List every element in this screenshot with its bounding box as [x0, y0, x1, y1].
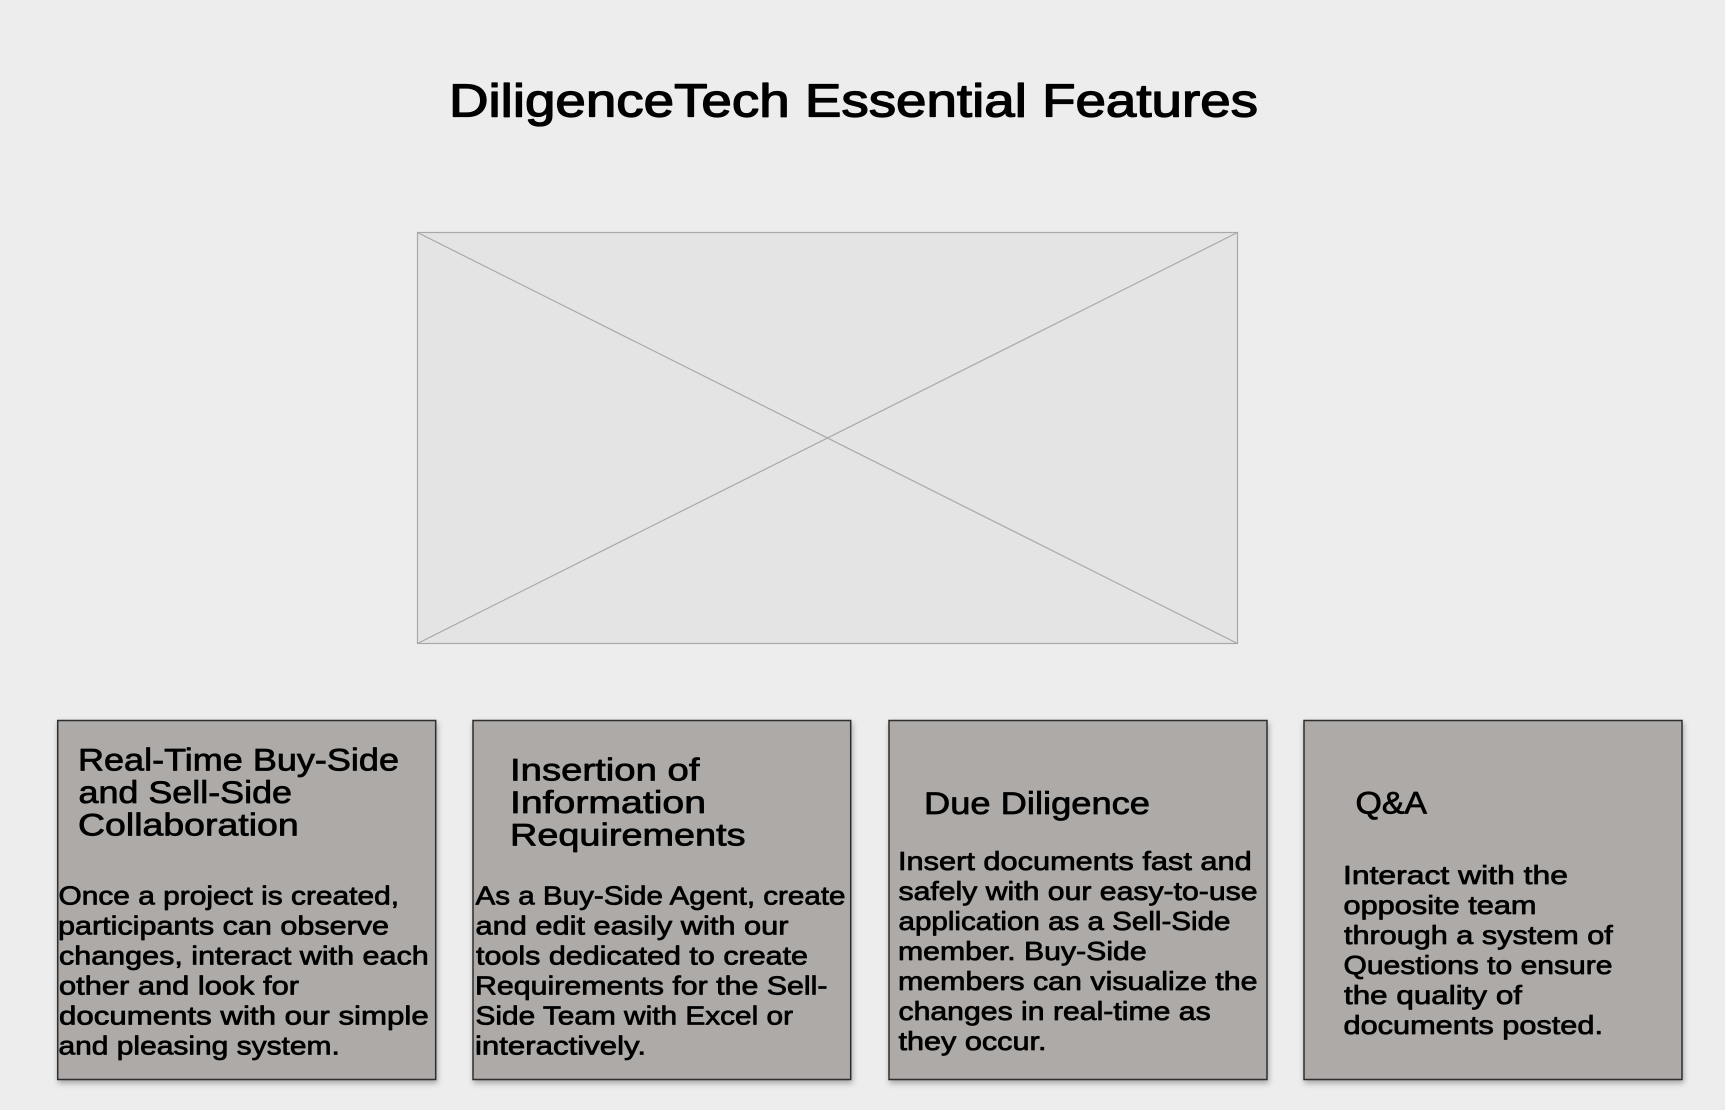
body text: q&a: opposite team — [1344, 890, 1536, 920]
body text: real-time collaboration: changes, interact with each — [59, 941, 429, 971]
heading: insertion of information requirements — [510, 752, 746, 853]
body text: q&a: documents posted. — [1344, 1010, 1603, 1040]
body text: real-time collaboration: and pleasing system. — [58, 1031, 340, 1061]
heading: q&a: Q&A — [1356, 784, 1427, 820]
body text: due diligence — [898, 846, 1258, 1056]
body text: real-time collaboration: participants can observe — [58, 911, 389, 941]
heading: due diligence: Due Diligence — [924, 785, 1150, 821]
body text: q&a — [1343, 860, 1614, 1040]
body text: due diligence: member. Buy-Side — [898, 936, 1147, 966]
heading: real-time collaboration: Real-Time Buy-Side — [78, 742, 399, 778]
body text: due diligence: application as a Sell-Side — [898, 906, 1230, 936]
heading: real-time collaboration — [78, 742, 399, 843]
panel: due diligence — [889, 720, 1267, 1080]
body text: real-time collaboration: documents with our simple — [59, 1001, 429, 1031]
body text: insertion of information requirements: tools dedicated to create — [476, 940, 808, 970]
body text: real-time collaboration — [58, 881, 429, 1061]
body text: due diligence: changes in real-time as — [898, 996, 1211, 1026]
image placeholder — [418, 232, 1238, 644]
body text: due diligence: they occur. — [898, 1026, 1046, 1056]
body text: insertion of information requirements: Side Team with Excel or — [476, 1000, 793, 1030]
body text: q&a: the quality of — [1344, 980, 1523, 1010]
heading: real-time collaboration: and Sell-Side — [78, 774, 292, 810]
body text: insertion of information requirements: and edit easily with our — [476, 910, 789, 940]
body text: insertion of information requirements: Requirements for the Sell- — [475, 970, 828, 1000]
body text: due diligence: members can visualize the — [898, 966, 1258, 996]
body text: insertion of information requirements: As a Buy-Side Agent, create — [476, 880, 846, 910]
body text: q&a: Interact with the — [1343, 860, 1568, 890]
body text: real-time collaboration: Once a project is created, — [58, 881, 399, 911]
panel: real-time collaboration — [58, 720, 436, 1080]
body text: q&a: through a system of — [1344, 920, 1614, 950]
body text: due diligence: Insert documents fast and — [898, 846, 1252, 876]
body text: due diligence: safely with our easy-to-use — [898, 876, 1258, 906]
panel: insertion of information requirements — [473, 720, 851, 1080]
body text: q&a: Questions to ensure — [1344, 950, 1612, 980]
heading: insertion of information requirements: Insertion of — [510, 752, 700, 788]
heading: real-time collaboration: Collaboration — [78, 807, 299, 843]
heading: insertion of information requirements: Requirements — [510, 817, 746, 853]
title: DiligenceTech Essential Features — [449, 74, 1258, 126]
body text: insertion of information requirements — [475, 880, 846, 1060]
panel: q&a — [1304, 720, 1682, 1080]
body text: real-time collaboration: other and look for — [59, 971, 299, 1001]
heading: insertion of information requirements: Information — [510, 784, 706, 820]
body text: insertion of information requirements: interactively. — [475, 1030, 646, 1060]
